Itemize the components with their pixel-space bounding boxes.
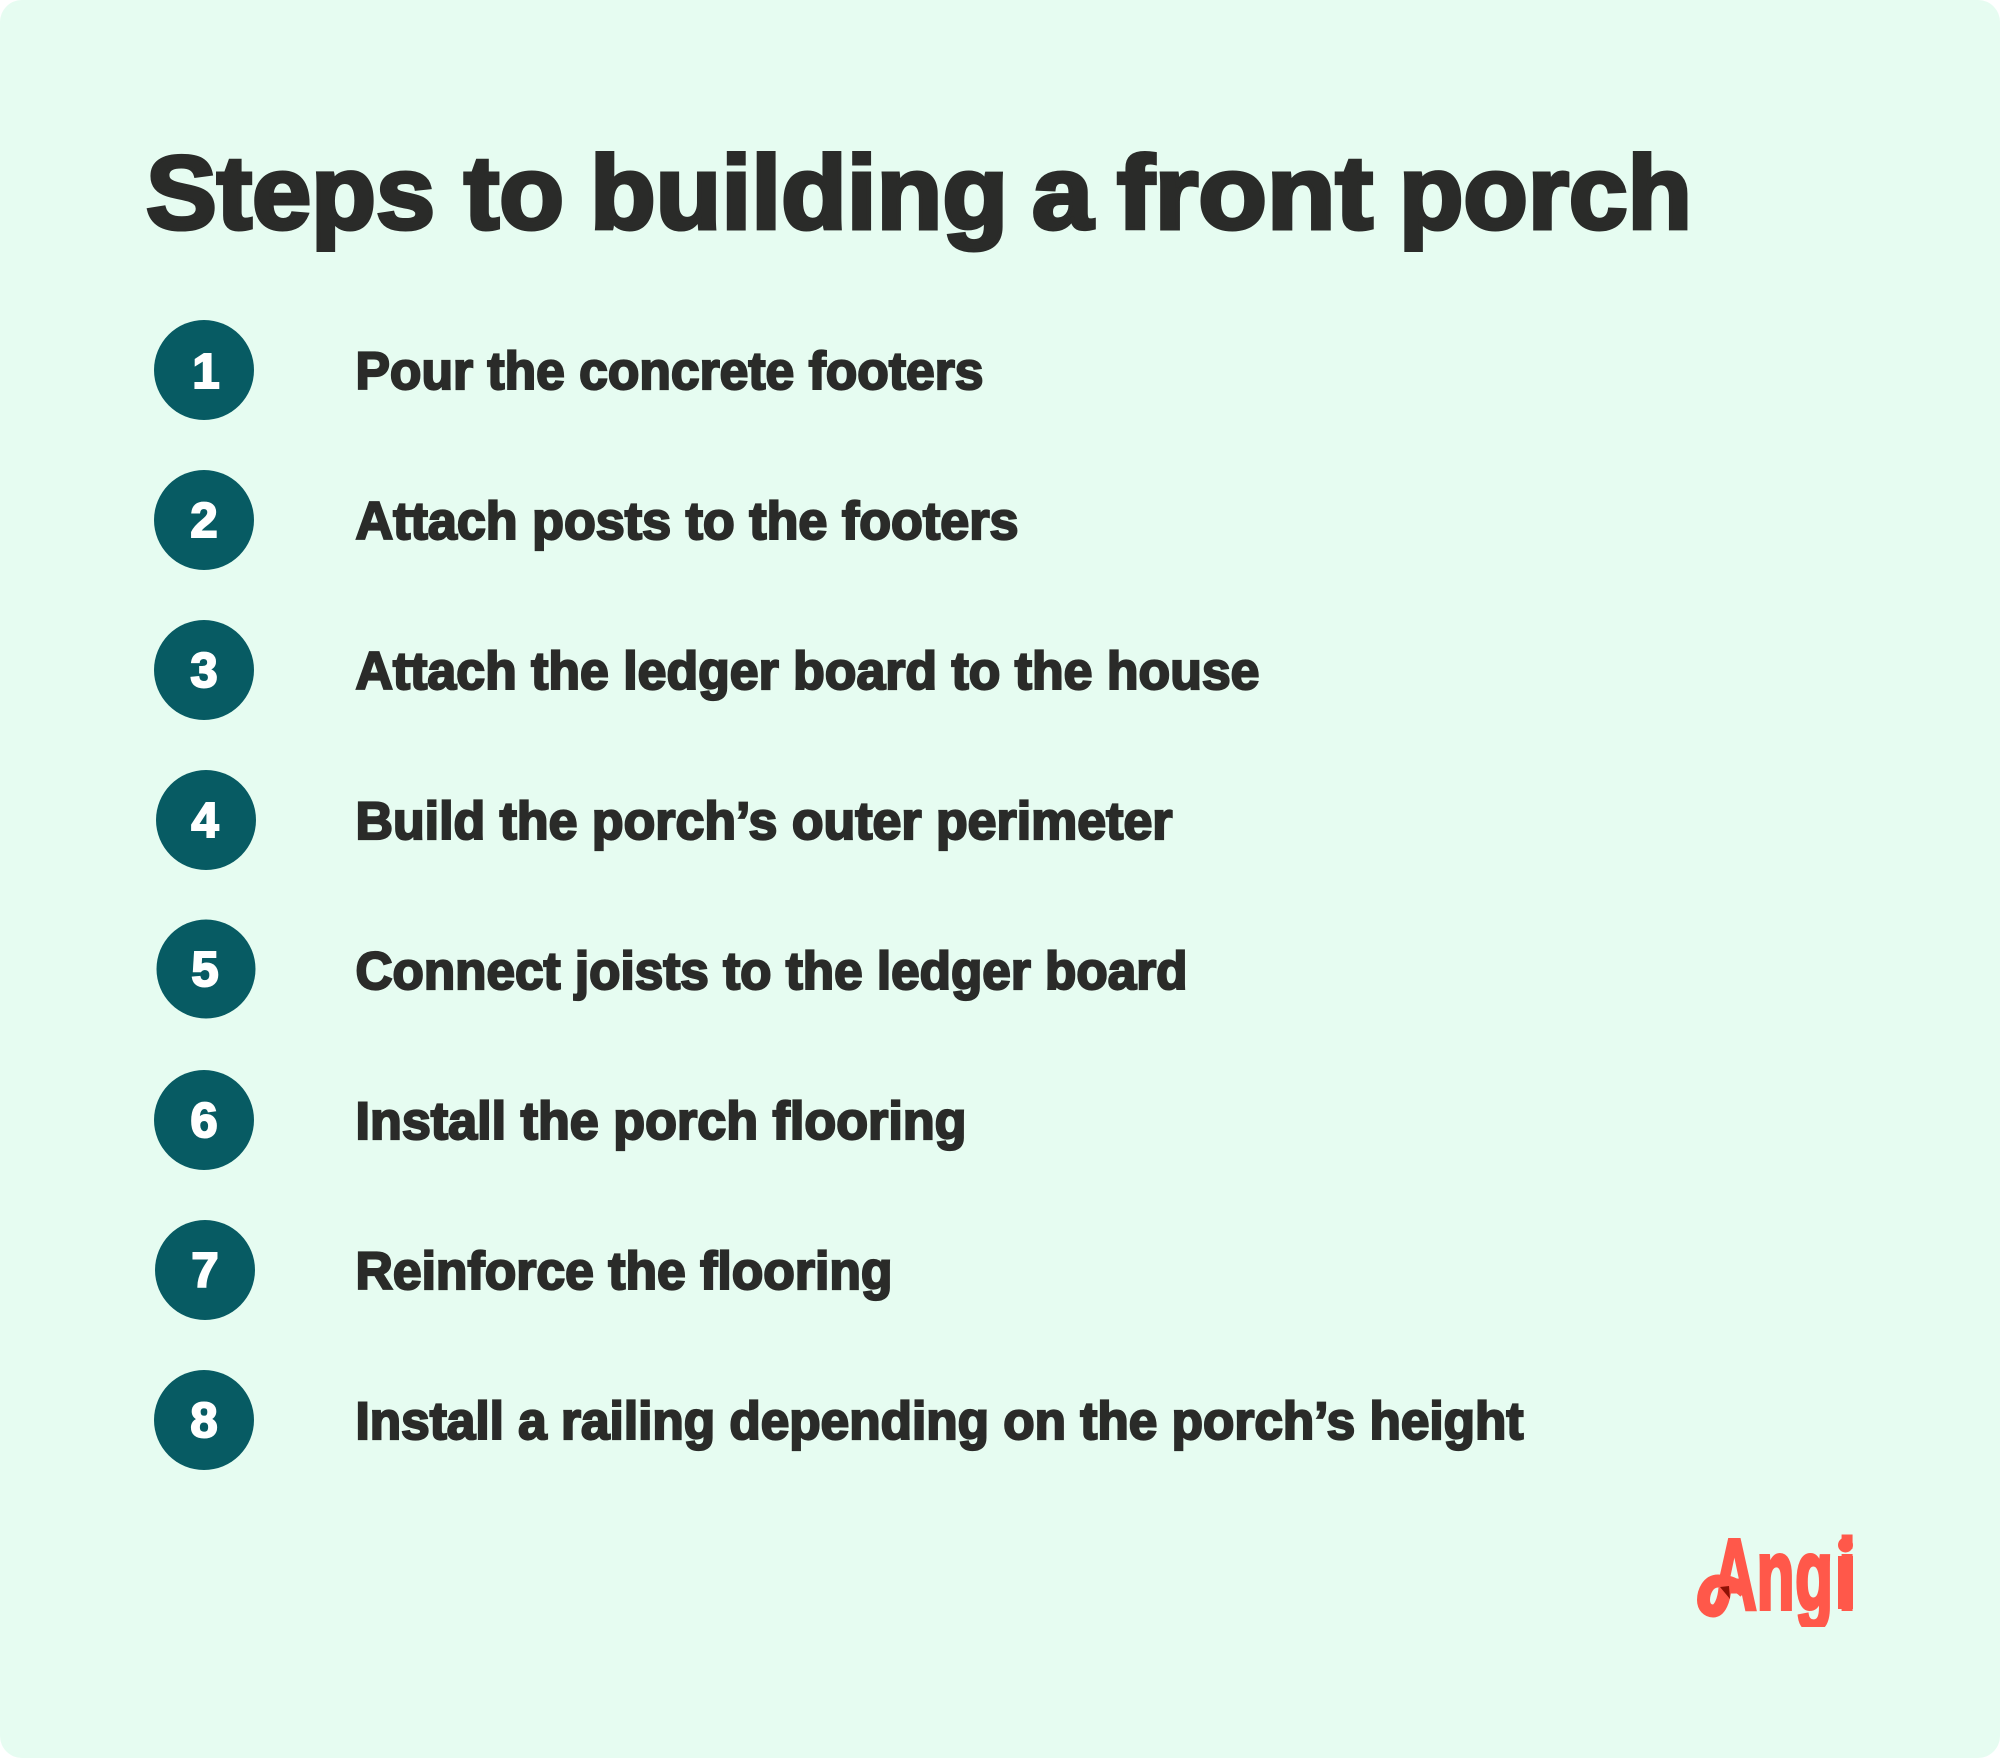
step 1 number badge: 1 (192, 345, 220, 399)
step 5 text: Connect joists to the ledger board (356, 942, 1188, 1001)
Angi logo (1697, 1534, 1853, 1627)
step 8 number badge (154, 1370, 254, 1470)
title: building (590, 136, 1008, 252)
step 3 number badge: 3 (190, 644, 218, 698)
step 2 (154, 470, 1018, 570)
logo fold (1720, 1586, 1730, 1599)
step 7 number badge (155, 1220, 255, 1320)
title: front (1117, 136, 1373, 252)
step 7 text: Reinforce the flooring (356, 1242, 892, 1301)
step 1 (154, 320, 984, 420)
step 5 number badge: 5 (191, 943, 219, 997)
step 4 (156, 770, 1172, 870)
title (146, 136, 1692, 252)
step 4 number badge: 4 (191, 794, 219, 848)
title: Steps (146, 136, 435, 252)
step 6 number badge (154, 1070, 254, 1170)
logo wordmark: Angi (1712, 1519, 1856, 1631)
step 6 text: Install the porch flooring (356, 1092, 966, 1151)
step 6 number badge: 6 (190, 1094, 218, 1148)
step 7 (155, 1220, 892, 1320)
step 5 number badge (156, 920, 256, 1018)
title: porch (1399, 136, 1692, 252)
step 1 text: Pour the concrete footers (356, 342, 984, 401)
step 4 number badge (156, 770, 256, 870)
title: a (1032, 136, 1094, 252)
step 1 number badge (154, 320, 254, 420)
step 4 text: Build the porch’s outer perimeter (356, 792, 1172, 851)
step 7 number badge: 7 (191, 1244, 219, 1298)
step 8 number badge: 8 (190, 1394, 218, 1448)
title: to (464, 136, 564, 252)
logo loop (1704, 1581, 1745, 1611)
step 2 text: Attach posts to the footers (356, 492, 1018, 551)
step 8 (154, 1370, 1524, 1470)
step 2 number badge: 2 (190, 494, 218, 548)
step 3 text: Attach the ledger board to the house (356, 642, 1260, 701)
step 6 (154, 1070, 966, 1170)
step 3 number badge (154, 620, 254, 720)
step 8 text: Install a railing depending on the porch’s height (356, 1392, 1524, 1451)
logo i stem and dot (1838, 1538, 1853, 1609)
step 5 (156, 920, 1188, 1018)
step 3 (154, 620, 1260, 720)
step 2 number badge (154, 470, 254, 570)
